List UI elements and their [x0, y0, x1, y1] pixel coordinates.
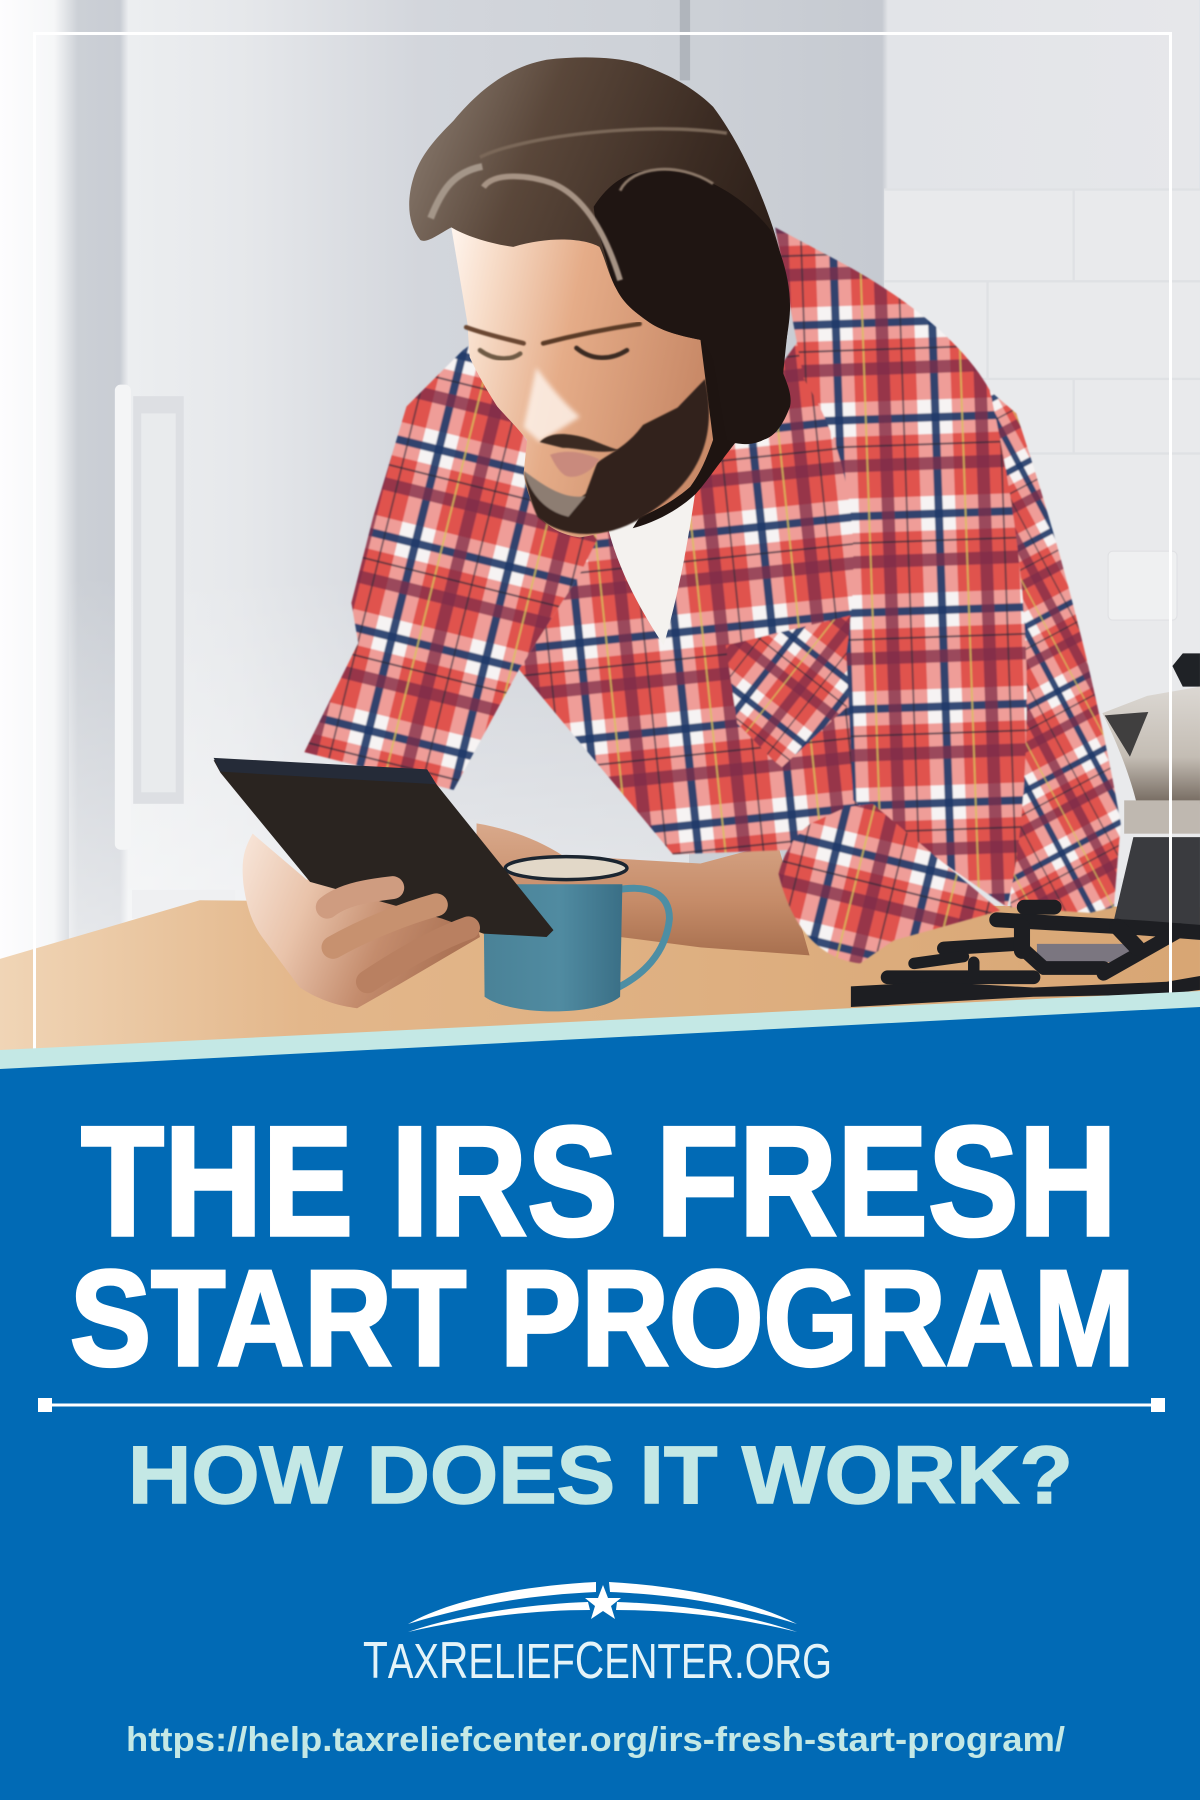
logo wordmark: TAXRELIEFCENTER.ORG	[363, 1632, 832, 1690]
nose highlight	[524, 367, 580, 442]
long hair behind the face and neck	[633, 307, 790, 528]
stove grates	[851, 907, 1200, 1007]
title	[70, 1095, 1135, 1394]
hair dark lock	[594, 170, 791, 444]
beard	[524, 379, 709, 534]
man's far forearm	[477, 823, 810, 955]
shirt pocket	[726, 614, 855, 768]
fingers over tablet edge	[327, 888, 469, 982]
subtitle: HOW DOES IT WORK?	[128, 1430, 1073, 1521]
blue enamel mug with coffee	[483, 857, 669, 1011]
shirt torso	[519, 333, 873, 854]
moka pot	[1102, 653, 1200, 930]
eyes and eyebrows	[466, 324, 640, 358]
source URL: https://help.taxreliefcenter.org/irs-fresh-start-program/	[126, 1721, 1066, 1759]
photo background: refrigerator and wall	[0, 0, 1200, 1079]
shirt left sleeve	[304, 344, 597, 790]
logo swooshes and star	[408, 1582, 797, 1632]
blue lower panel	[0, 1007, 1200, 1800]
mouth and moustache	[540, 434, 620, 477]
plaid shirt	[304, 227, 1121, 963]
diagonal mint band	[0, 991, 1200, 1080]
near arm and hand holding the tablet	[243, 834, 480, 1008]
divider with square end caps	[38, 1398, 1165, 1412]
wooden counter	[0, 900, 1200, 1068]
white t-shirt	[609, 488, 696, 645]
logo: TaxReliefCenter.org	[363, 1582, 832, 1690]
tablet	[214, 758, 553, 937]
hair	[409, 57, 790, 340]
rolled cuff	[779, 804, 1000, 963]
shirt back panel	[976, 379, 1121, 913]
panel: photo of man reading a tablet at a kitchen counter	[0, 0, 1200, 1079]
hair highlights	[431, 129, 727, 280]
white frame outline	[34, 34, 1170, 1134]
shirt right sleeve	[775, 227, 1027, 907]
face	[451, 227, 713, 537]
